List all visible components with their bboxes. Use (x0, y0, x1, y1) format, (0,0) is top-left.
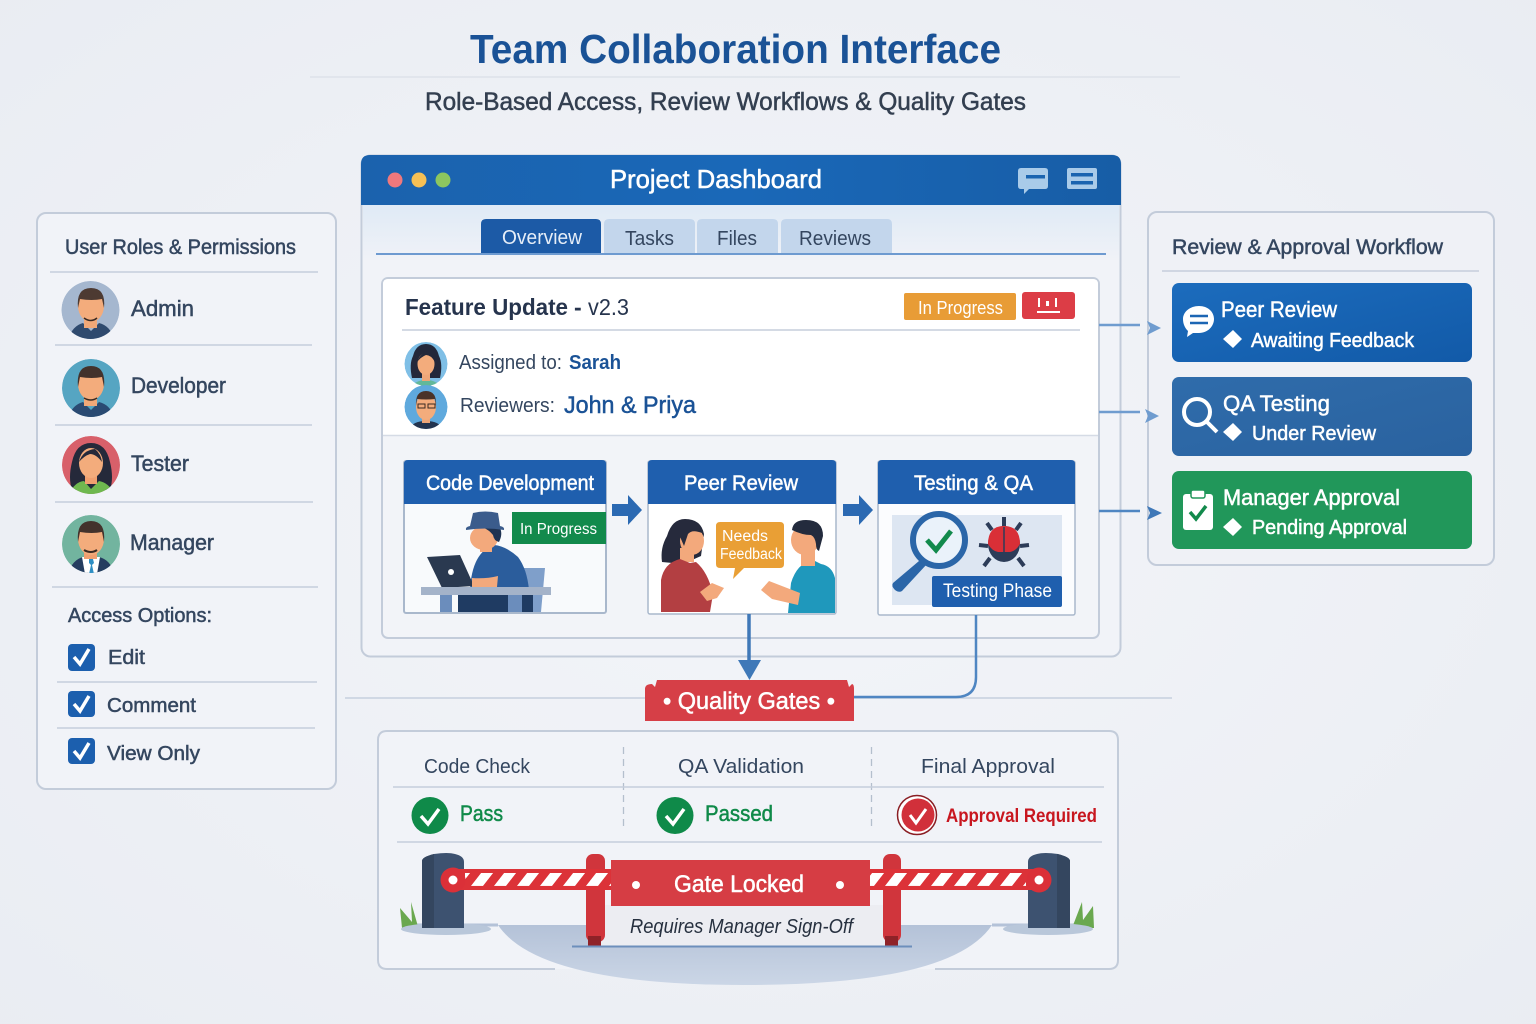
sign: gate locked: Gate Locked (674, 871, 804, 898)
column headers: Final Approval (921, 755, 1055, 778)
status: qa validation passed (656, 797, 773, 834)
label: admin: Admin (131, 296, 194, 321)
avatar: reviewer (404, 385, 448, 430)
card: qa testing: Under Review (1252, 423, 1377, 445)
card: manager approval: Manager Approval (1223, 485, 1400, 510)
label: developer: Developer (131, 373, 226, 398)
label: tester: Tester (131, 451, 189, 476)
arrow: peer to testing (843, 495, 873, 525)
dashboard header bar (361, 155, 1121, 205)
left sign post (586, 854, 605, 946)
banner: quality gates: • Quality Gates • (663, 688, 835, 715)
column headers: Code Check (424, 755, 531, 778)
tab: files (697, 219, 778, 255)
reviewer names: John & Priya (564, 392, 697, 419)
card: peer review (1172, 283, 1472, 362)
dashboard header bar: Project Dashboard (610, 164, 822, 194)
status: approval required (898, 796, 1097, 834)
card: manager approval: Pending Approval (1252, 517, 1407, 539)
panel: review and approval workflow (1148, 212, 1494, 565)
checkbox: edit (68, 644, 145, 671)
assigned to: Assigned to: (459, 352, 562, 374)
tab: overview (481, 219, 601, 255)
tab: files: Files (717, 228, 757, 250)
checkbox: view only: View Only (107, 742, 201, 765)
tag: testing phase (932, 576, 1062, 607)
left bar knob (440, 868, 466, 892)
panel: user roles and permissions (37, 213, 336, 789)
card: qa testing (1172, 377, 1472, 456)
speech bubble: needs feedback: Needs (722, 528, 768, 545)
step: testing and qa (878, 460, 1075, 615)
icon: bug (979, 517, 1029, 566)
connector arrow: qa status (1099, 409, 1159, 423)
tag: testing phase: Testing Phase (943, 581, 1052, 602)
card: feature update (382, 278, 1099, 638)
subtitle: Role-Based Access, Review Workflows & Quality Gates (425, 88, 1026, 116)
illustration: locked gate barrier (400, 853, 1094, 946)
status: code check pass: Pass (460, 801, 503, 826)
card: qa testing: QA Testing (1223, 391, 1330, 416)
icon: magnifier with check (892, 514, 965, 592)
sign: requires manager sign-off: Requires Manager Sign-Off (630, 916, 855, 938)
card: peer review: Peer Review (1221, 297, 1337, 322)
step: testing and qa: Testing & QA (914, 472, 1033, 495)
title: Team Collaboration Interface (470, 26, 1001, 72)
reviewers: Reviewers: (460, 395, 555, 417)
connector: testing to quality gates (854, 615, 976, 697)
avatar: tester (62, 436, 120, 496)
avatar: developer (62, 359, 120, 418)
feature title: Feature Update (405, 294, 568, 320)
sign board (600, 905, 885, 946)
card: peer review: Awaiting Feedback (1251, 330, 1415, 352)
step: code development (404, 460, 606, 613)
icon: speech bubble (1183, 306, 1214, 337)
speech bubble: needs feedback: Feedback (720, 546, 782, 563)
tab: reviews: Reviews (799, 228, 871, 250)
arrow: peer review to quality gates (738, 614, 761, 680)
connector arrow: peer review status (1099, 321, 1161, 335)
tab: overview: Overview (502, 227, 583, 249)
icon: clipboard (1183, 490, 1213, 530)
icon: chat (1018, 168, 1048, 194)
tab: tasks: Tasks (625, 228, 674, 250)
heading: workflow: Review & Approval Workflow (1172, 236, 1444, 259)
illustration: two people discussing (661, 519, 835, 613)
panel: quality gate checks (378, 731, 1118, 985)
step: peer review (648, 460, 836, 614)
right striped bar (868, 869, 1040, 890)
column headers: QA Validation (678, 755, 804, 778)
divider behind quality gates (345, 697, 1172, 699)
card: manager approval (1172, 471, 1472, 549)
badge: in progress (904, 293, 1016, 320)
connector arrow: manager status (1099, 506, 1162, 520)
avatar: admin (62, 281, 120, 340)
panel: project dashboard (361, 155, 1121, 656)
status: code check pass (412, 797, 503, 834)
left gate post (400, 853, 491, 935)
label: manager: Manager (130, 530, 214, 555)
feature title: v2.3 (588, 294, 629, 320)
badge: in progress: In Progress (918, 298, 1003, 318)
heading: user roles: User Roles & Permissions (65, 236, 296, 259)
checkbox: edit: Edit (108, 646, 145, 669)
tab: reviews (781, 219, 892, 255)
checkbox: comment (68, 691, 196, 717)
assigned to: Sarah (569, 352, 621, 374)
banner: quality gates (645, 680, 854, 721)
speech bubble: needs feedback (716, 522, 784, 579)
tab: tasks (604, 219, 695, 255)
feature title: - (574, 294, 582, 320)
status: qa validation passed: Passed (705, 801, 773, 826)
right bar knob (1026, 868, 1052, 892)
avatar: sarah (404, 342, 448, 388)
badge: red alert icon (1022, 292, 1075, 319)
pool shadow under gate (498, 925, 992, 985)
tag: in progress: In Progress (520, 521, 597, 538)
column headers (424, 755, 1055, 778)
checkbox: comment: Comment (107, 694, 196, 717)
heading: access options: Access Options: (68, 605, 212, 627)
tag: in progress (512, 512, 606, 544)
avatar: manager (62, 515, 120, 574)
checkbox: view only (68, 738, 201, 765)
illustration: developer at laptop (421, 512, 551, 612)
icon: magnifier (1184, 399, 1217, 432)
right gate post (1003, 853, 1094, 935)
arrow: code to peer (612, 495, 642, 525)
icon: menu (1067, 168, 1097, 189)
step: peer review: Peer Review (684, 472, 799, 495)
left striped bar (452, 869, 614, 890)
right sign post (883, 854, 901, 946)
sign: gate locked (611, 860, 870, 906)
step: code development: Code Development (426, 472, 594, 495)
status: approval required: Approval Required (946, 806, 1097, 827)
